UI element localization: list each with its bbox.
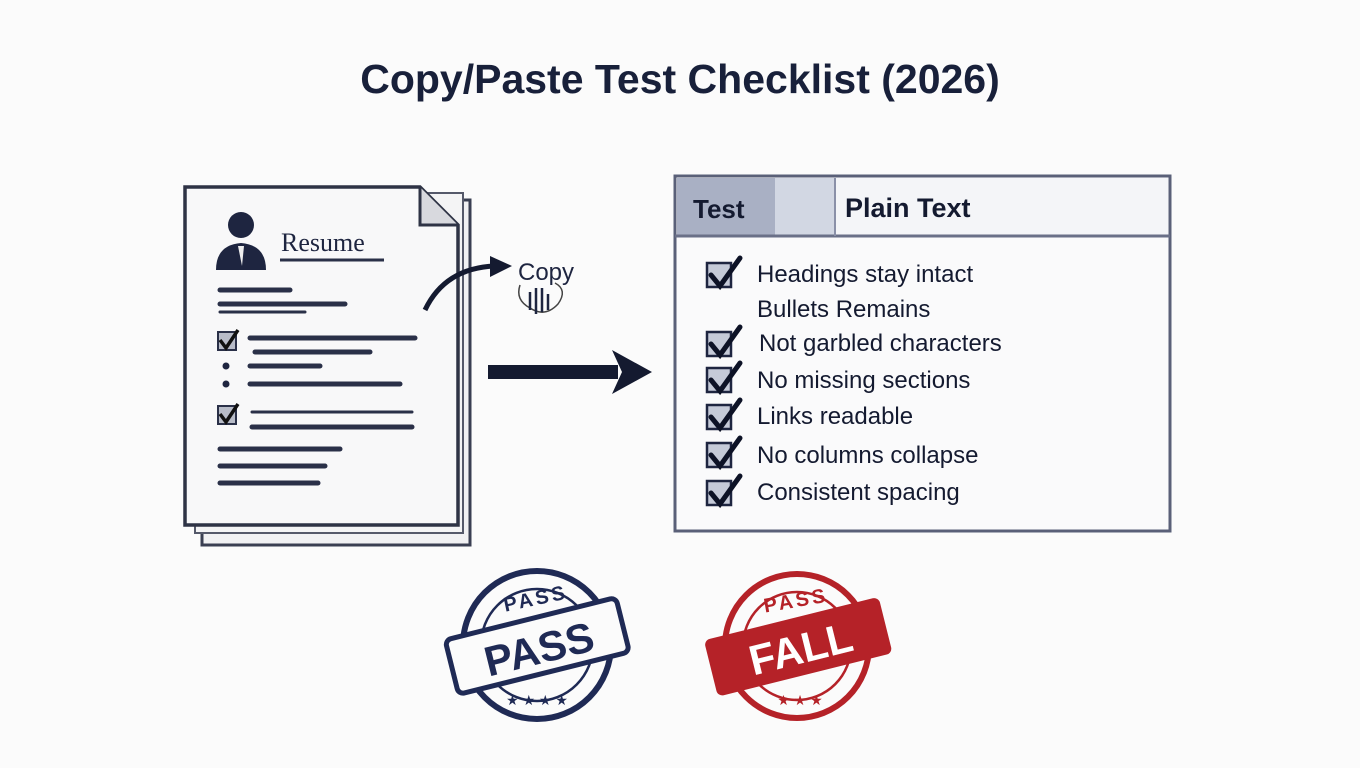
- checklist items: [757, 261, 1002, 506]
- copy label with icon: Copy: [518, 259, 574, 286]
- panel: plain text checklist: [675, 176, 1170, 531]
- stamp: pass: ★ ★ ★ ★: [506, 692, 568, 708]
- panel: plain text checklist: Test: [693, 194, 745, 224]
- title: Copy/Paste Test Checklist (2026): [360, 56, 1000, 102]
- stamp: fail: FALL: [744, 613, 857, 684]
- stamp: pass: PASS: [479, 613, 599, 685]
- checklist items: Not garbled characters: [759, 330, 1002, 357]
- stamp: pass: PASS: [502, 582, 570, 617]
- resume heading: Resume: [281, 228, 365, 257]
- checklist items: No columns collapse: [757, 442, 978, 469]
- checklist items: Links readable: [757, 403, 913, 430]
- checklist items: Bullets Remains: [757, 296, 930, 323]
- copy label with icon: [518, 259, 574, 314]
- arrow: curved copy: [425, 256, 512, 310]
- checkboxes: [707, 263, 731, 505]
- stamp: fail: [704, 574, 893, 718]
- text lines: [220, 290, 415, 483]
- panel: plain text checklist: Plain Text: [845, 193, 971, 223]
- stamp: pass: [445, 571, 629, 719]
- checklist items: Consistent spacing: [757, 479, 960, 506]
- icon: person: [216, 212, 266, 270]
- checklist items: Headings stay intact: [757, 261, 973, 288]
- arrow: main: [488, 350, 652, 394]
- stamp: fail: ★ ★ ★: [777, 692, 823, 708]
- resume document: [185, 187, 470, 545]
- stamp: fail: PASS: [762, 585, 830, 618]
- checklist items: No missing sections: [757, 367, 970, 394]
